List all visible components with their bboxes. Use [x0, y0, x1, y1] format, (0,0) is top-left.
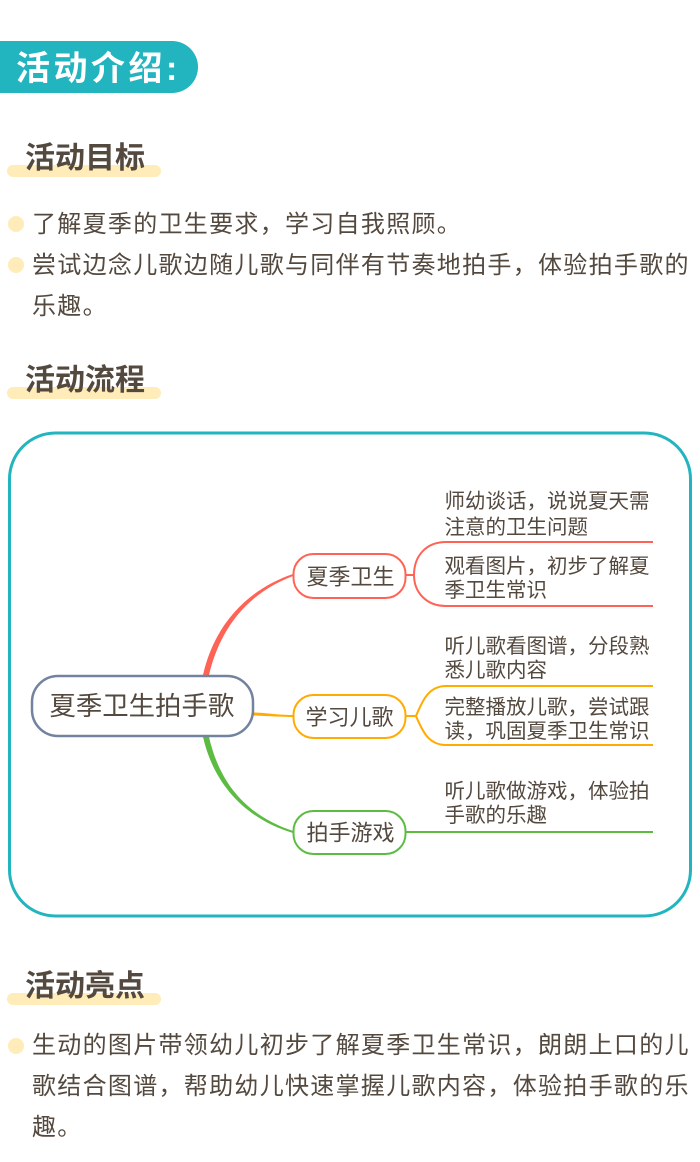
leaf group: red: 注意的卫生问题 [444, 516, 588, 539]
leaf group: green: 手歌的乐趣 [444, 804, 547, 827]
bullet dot 3 [8, 1038, 24, 1054]
node: learn the song: 学习儿歌 [306, 705, 394, 730]
heading: activity highlights: 活动亮点 [25, 970, 145, 1003]
leaf group: red: 季卫生常识 [444, 579, 547, 602]
leaf group: red: 观看图片，初步了解夏 [444, 555, 650, 578]
root node [32, 676, 253, 736]
node: learn the song [294, 695, 406, 738]
bullet dot 1 [8, 216, 24, 232]
mind map panel [8, 432, 692, 918]
goal text 2: 乐趣。 [32, 293, 108, 320]
goal text 2: 尝试边念儿歌边随儿歌与同伴有节奏地拍手，体验拍手歌的 [32, 252, 690, 279]
leaf group: orange: 读，巩固夏季卫生常识 [444, 720, 650, 743]
leaf group: green: 听儿歌做游戏，体验拍 [444, 780, 650, 803]
panel border [10, 433, 690, 916]
node: summer hygiene [294, 554, 406, 598]
node: summer hygiene: 夏季卫生 [306, 564, 395, 590]
node: clapping game: 拍手游戏 [306, 820, 395, 846]
branch: green connector [203, 737, 293, 833]
heading: activity goals: 活动目标 [25, 142, 145, 175]
title banner [0, 41, 198, 93]
leaf group: orange [406, 635, 653, 745]
leaf group: green [406, 780, 653, 832]
highlight text: 趣。 [32, 1114, 83, 1141]
leaf group: orange: 听儿歌看图谱，分段熟 [444, 635, 650, 658]
highlight text: 歌结合图谱，帮助幼儿快速掌握儿歌内容，体验拍手歌的乐 [32, 1073, 690, 1100]
leaf group: red [406, 490, 653, 606]
node: clapping game [294, 811, 406, 854]
heading: activity process: 活动流程 [25, 364, 145, 397]
goal text 1: 了解夏季的卫生要求，学习自我照顾。 [32, 211, 462, 238]
branch: red connector [203, 574, 293, 675]
branch: orange connector [253, 712, 293, 717]
goal text 2 [32, 252, 690, 320]
root node: 夏季卫生拍手歌 [50, 691, 234, 721]
title banner: 活动介绍: [16, 50, 181, 88]
leaf group: orange: 悉儿歌内容 [444, 659, 547, 682]
highlight text [32, 1032, 690, 1141]
leaf group: orange: 完整播放儿歌，尝试跟 [444, 696, 650, 719]
bullet dot 2 [8, 257, 24, 273]
leaf group: red: 师幼谈话，说说夏天需 [444, 490, 650, 513]
highlight text: 生动的图片带领幼儿初步了解夏季卫生常识，朗朗上口的儿 [32, 1032, 690, 1059]
